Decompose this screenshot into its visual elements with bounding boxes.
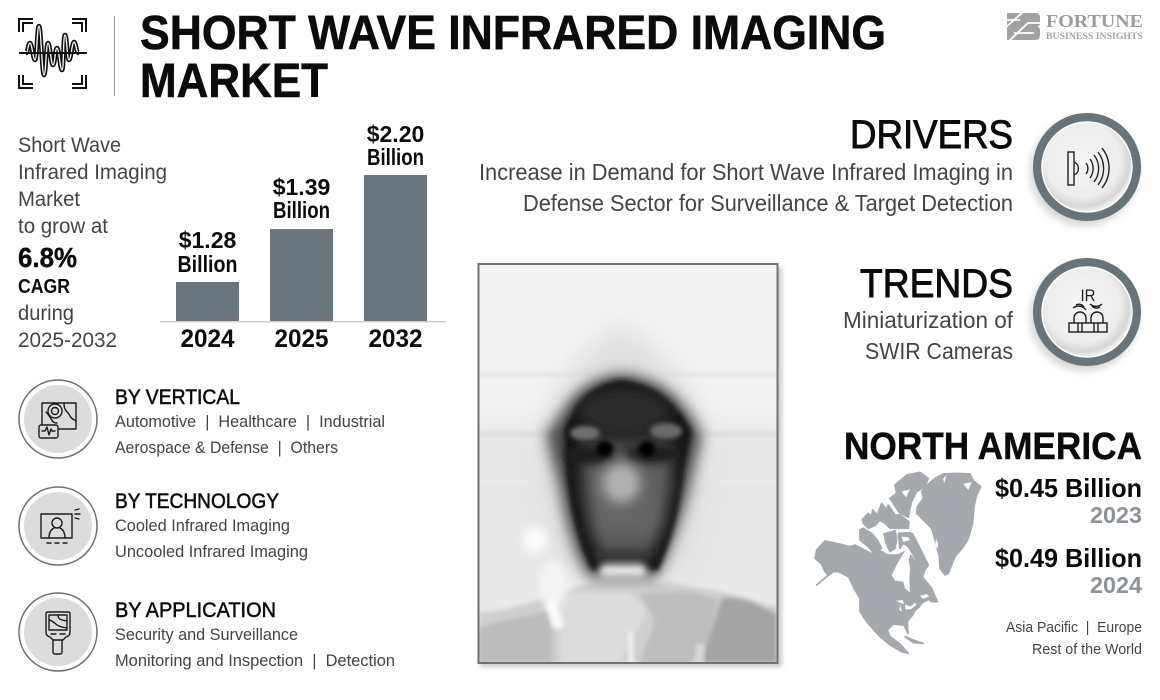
stat: 2023 value: [995, 473, 1142, 528]
trends description: Miniaturization of: [843, 307, 1014, 333]
bar chart: market size: Billion: [178, 251, 238, 277]
segment: by technology: Uncooled Infrared Imaging: [115, 542, 308, 561]
other regions list: Rest of the World: [1032, 641, 1142, 658]
drivers description: Increase in Demand for Short Wave Infrared Imaging in: [479, 159, 1013, 185]
segment: by vertical: Aerospace & Defense | Others: [115, 438, 338, 457]
segment: by technology: [19, 487, 308, 565]
segment: by technology: BY TECHNOLOGY: [115, 490, 279, 513]
drivers heading: DRIVERS: [850, 113, 1013, 157]
segment: by application: [19, 593, 395, 671]
bar chart: market size: Billion: [273, 197, 330, 223]
bar chart: market size: $2.20: [367, 121, 424, 147]
text block: growth summary: Short Wave: [18, 134, 121, 157]
text block: growth summary: to grow at: [18, 215, 108, 238]
stat: 2024 value: $0.49 Billion: [995, 543, 1142, 573]
text block: growth summary: Market: [18, 188, 80, 211]
segment: by technology: Cooled Infrared Imaging: [115, 516, 290, 535]
map: North America: [815, 472, 981, 653]
title: SHORT WAVE INFRARED IMAGING: [140, 7, 886, 60]
stat: 2023 value: 2023: [1090, 502, 1142, 528]
icon: trends IR sensor button: IR: [1080, 286, 1096, 305]
icon: trends IR sensor button: [1030, 258, 1141, 371]
bar chart: market size: 2032: [368, 325, 422, 353]
text block: growth summary: Infrared Imaging: [18, 161, 167, 184]
text block: growth summary: 2025-2032: [18, 329, 117, 352]
segment: by application: Monitoring and Inspection | Detection: [115, 651, 395, 670]
bar chart: market size: $1.28: [179, 227, 236, 253]
bar chart: market size: 2025: [274, 325, 329, 353]
drivers description: Defense Sector for Surveillance & Target Detection: [523, 190, 1013, 216]
icon: thermal camera: [19, 593, 97, 671]
stat: 2023 value: $0.45 Billion: [995, 473, 1142, 503]
stat: 2024 value: [995, 543, 1142, 598]
stat: 2024 value: 2024: [1090, 572, 1142, 598]
bar chart: market size: [160, 121, 446, 353]
segment: by vertical: [19, 380, 385, 458]
regional heading: North America: NORTH AMERICA: [844, 426, 1142, 468]
segment: by application: BY APPLICATION: [115, 599, 276, 622]
brand logo: Fortune Business Insights: [1005, 11, 1143, 42]
segment: by vertical: BY VERTICAL: [115, 386, 240, 409]
title: [140, 7, 886, 108]
segment: by application: Security and Surveillance: [115, 625, 298, 644]
text block: growth summary: [18, 134, 167, 352]
segment: by vertical: Automotive | Healthcare | Industrial: [115, 412, 385, 431]
icon: screen with person: [19, 487, 97, 565]
photo: thermal SWIR portrait: [478, 263, 784, 670]
text block: growth summary: during: [18, 302, 74, 325]
other regions list: [1006, 619, 1142, 658]
title: MARKET: [140, 55, 328, 108]
text block: growth summary: CAGR: [18, 276, 70, 298]
bar chart: market size: $1.39: [273, 174, 330, 200]
drivers description: [479, 159, 1013, 216]
other regions list: Asia Pacific | Europe: [1006, 619, 1142, 636]
text block: growth summary: 6.8%: [18, 242, 77, 273]
bar chart: market size: 2024: [180, 325, 235, 353]
trends heading: TRENDS: [860, 262, 1013, 306]
trends description: SWIR Cameras: [865, 338, 1013, 364]
icon: drivers signal button: [1030, 113, 1141, 226]
trends description: [843, 307, 1014, 364]
header divider: [114, 16, 115, 96]
brand logo: Fortune Business Insights: BUSINESS INSIGHTS: [1046, 32, 1143, 42]
brand logo: Fortune Business Insights: FORTUNE: [1046, 11, 1143, 31]
icon: map with signal: [19, 380, 97, 458]
logo icon: waveform in scan frame: [19, 19, 87, 88]
bar chart: market size: Billion: [367, 144, 424, 170]
